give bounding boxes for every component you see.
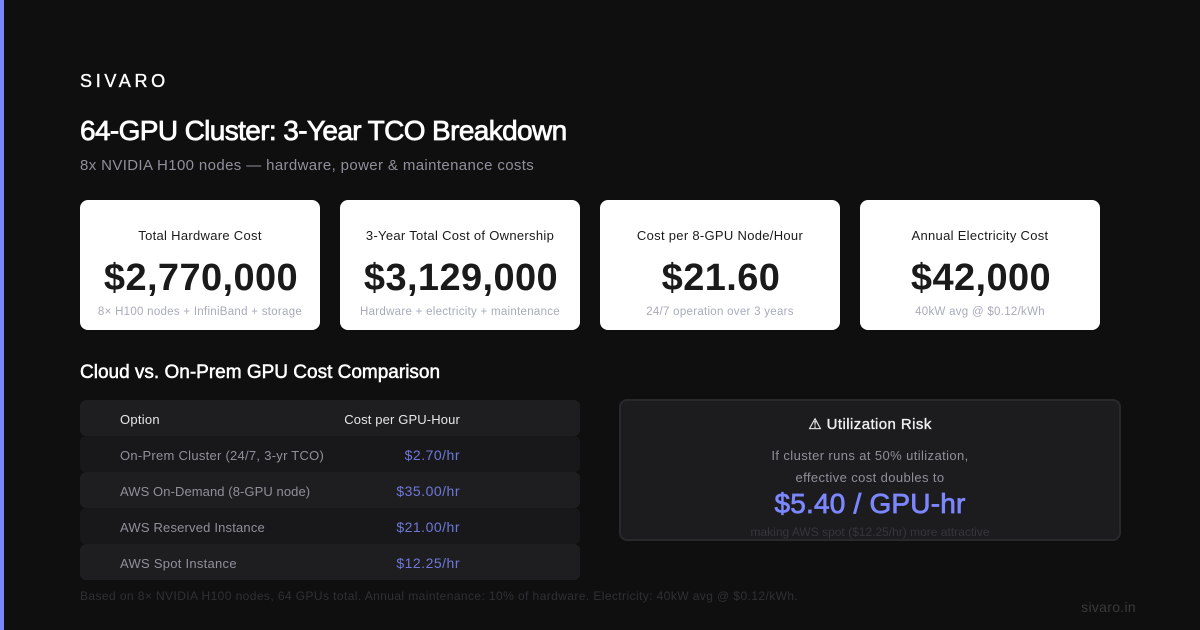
table header row: Cost per GPU-Hour: [344, 412, 460, 427]
table row: on-demand: [80, 472, 580, 508]
panel: utilization risk: [619, 399, 1121, 541]
stat card: annual electricity: [860, 200, 1100, 330]
panel text: effective cost doubles to: [796, 470, 944, 485]
stat card: cost per node hour: 24/7 operation over 3 years: [646, 306, 794, 318]
table row: on-prem: On-Prem Cluster (24/7, 3-yr TCO): [120, 448, 324, 463]
stat card: total hardware cost: 8× H100 nodes + InfiniBand + storage: [98, 306, 302, 318]
site url: sivaro.in: [1081, 599, 1136, 615]
stat card: total hardware cost: $2,770,000: [104, 257, 298, 299]
table row: on-prem: $2.70/hr: [405, 447, 460, 463]
panel text: If cluster runs at 50% utilization,: [771, 448, 969, 463]
table header row: Option: [120, 412, 160, 427]
table row: on-demand: $35.00/hr: [396, 483, 460, 499]
panel text: [771, 448, 969, 485]
accent bar: [0, 0, 4, 630]
table row: spot: AWS Spot Instance: [120, 556, 237, 571]
table row: reserved: [80, 508, 580, 544]
section heading: Cloud vs. On-Prem GPU Cost Comparison: [80, 362, 440, 383]
table header row: [80, 400, 580, 436]
stat card: cost per node hour: $21.60: [662, 257, 780, 299]
table row: reserved: $21.00/hr: [396, 519, 460, 535]
table row: spot: $12.25/hr: [396, 555, 460, 571]
stat card: annual electricity: 40kW avg @ $0.12/kWh: [915, 306, 1045, 318]
stat card: annual electricity: $42,000: [911, 257, 1051, 299]
stat card: total hardware cost: [80, 200, 320, 330]
comparison table: [80, 400, 580, 580]
stat card: annual electricity: Annual Electricity Cost: [912, 228, 1048, 243]
table row: on-demand: AWS On-Demand (8-GPU node): [120, 484, 310, 499]
subtitle: 8x NVIDIA H100 nodes — hardware, power & maintenance costs: [80, 157, 534, 174]
brand logo: SIVARO: [80, 71, 169, 91]
panel heading: ⚠ Utilization Risk: [808, 416, 932, 433]
panel big number: $5.40 / GPU-hr: [774, 488, 966, 519]
stat card: 3-year TCO: 3-Year Total Cost of Ownership: [366, 228, 554, 243]
panel note: making AWS spot ($12.25/hr) more attractive: [750, 525, 990, 539]
title: 64-GPU Cluster: 3-Year TCO Breakdown: [80, 115, 567, 146]
table row: spot: [80, 544, 580, 580]
stat card: cost per node hour: Cost per 8-GPU Node/Hour: [637, 228, 803, 243]
footnote: Based on 8× NVIDIA H100 nodes, 64 GPUs total. Annual maintenance: 10% of hardware. Electricity: 40kW avg @ $0.12/kWh.: [80, 589, 798, 603]
stat card: 3-year TCO: [340, 200, 580, 330]
stat card: 3-year TCO: Hardware + electricity + maintenance: [360, 306, 560, 318]
stat card: total hardware cost: Total Hardware Cost: [138, 228, 262, 243]
table row: reserved: AWS Reserved Instance: [120, 520, 265, 535]
stat card: cost per node hour: [600, 200, 840, 330]
stat card: 3-year TCO: $3,129,000: [364, 257, 558, 299]
table row: on-prem: [80, 436, 580, 472]
